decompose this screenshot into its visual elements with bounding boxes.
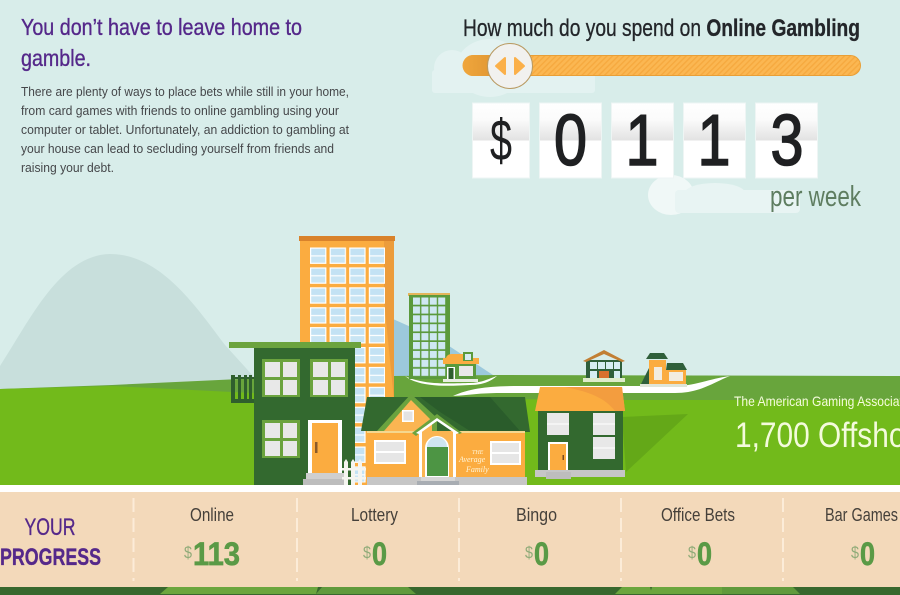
counter cards: 1 (626, 101, 658, 181)
category: office bets: 0 (697, 536, 712, 572)
cloud behind per week (648, 175, 800, 215)
title: You don’t have to leave home to (21, 14, 302, 40)
category: lottery (351, 505, 398, 572)
right green house (535, 387, 625, 479)
counter cards: 0 (554, 101, 587, 181)
category: bar games (825, 505, 898, 572)
category: bar games: 0 (860, 536, 875, 572)
category: bingo: 0 (534, 536, 549, 572)
slider (462, 44, 860, 88)
per week label: per week (770, 181, 861, 213)
category: bingo: Bingo (516, 505, 557, 525)
intro text block: your house can lead to secluding yourself from friends and (21, 141, 334, 156)
family name sign: Family (465, 465, 489, 474)
intro text block (21, 84, 349, 175)
distant house with peaked roof (583, 350, 625, 382)
family name sign (458, 450, 489, 474)
back green ground (0, 375, 900, 420)
title: gamble. (21, 45, 91, 71)
progress heading: PROGRESS (0, 544, 101, 571)
category: bar games: $ (851, 543, 859, 562)
small blue hill (393, 319, 496, 385)
counter cards (472, 101, 818, 181)
category: lottery: $ (363, 543, 371, 562)
counter cards: $ (490, 108, 512, 173)
white divider band (0, 485, 900, 492)
progress heading: YOUR (24, 514, 76, 541)
slider knob (488, 44, 532, 88)
road (453, 376, 730, 396)
category: online: Online (190, 505, 234, 525)
porch (412, 414, 462, 479)
counter cards: 3 (770, 101, 804, 181)
category: online: 113 (193, 536, 240, 572)
offshore statistic text (734, 393, 900, 455)
bottom dark green ground strip (0, 587, 900, 595)
green mid-rise building (408, 293, 450, 379)
category: bingo: $ (525, 543, 533, 562)
category: online (184, 505, 240, 572)
front green ground (0, 386, 900, 485)
intro text block: There are plenty of ways to place bets while still in your home, (21, 84, 349, 99)
intro text block: from card games with friends to online gambling using your (21, 103, 340, 118)
category: online: $ (184, 543, 192, 562)
category: office bets: Office Bets (661, 505, 735, 525)
balcony railing (231, 375, 254, 403)
cloud behind slider (432, 39, 595, 97)
tall orange building (299, 236, 395, 485)
road curve (405, 376, 497, 386)
progress heading (0, 514, 101, 571)
category: lottery: Lottery (351, 505, 398, 525)
intro text block: raising your debt. (21, 160, 114, 175)
slider heading: How much do you spend on Online Gambling (463, 15, 860, 42)
category: office bets (661, 505, 735, 572)
category: office bets: $ (688, 543, 696, 562)
family name sign: THE (472, 450, 484, 456)
counter cards: 1 (698, 101, 730, 181)
large grey mountain (0, 254, 255, 395)
category: bingo (516, 505, 557, 572)
title (21, 14, 302, 71)
white picket fence (342, 459, 366, 485)
family name sign: Average (458, 455, 486, 464)
dark green foreground house (229, 342, 361, 485)
right house shadow (622, 414, 688, 472)
middle orange family house (361, 394, 530, 485)
category: lottery: 0 (372, 536, 387, 572)
progress panel (0, 492, 900, 587)
small distant house left (443, 352, 479, 382)
distant orange house (640, 353, 687, 387)
intro text block: computer or tablet. Unfortunately, an addiction to gambling at (21, 122, 349, 137)
